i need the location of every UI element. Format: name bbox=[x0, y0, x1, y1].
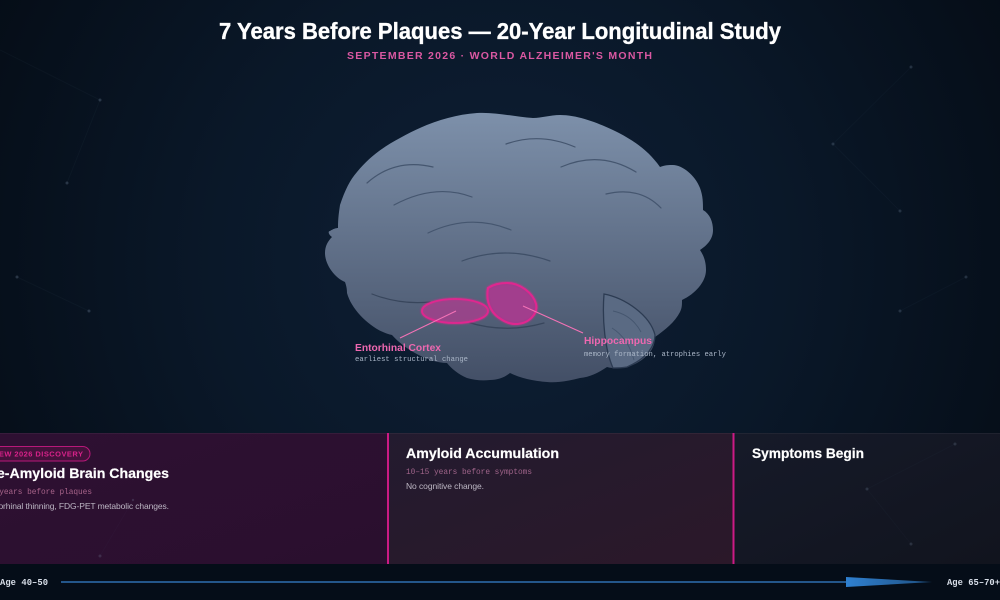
brain silhouette bbox=[325, 113, 713, 382]
panel: symptoms begin bbox=[734, 433, 1000, 564]
timeline bar bbox=[0, 564, 1000, 600]
hippocampus region bbox=[487, 283, 536, 324]
label: entorhinal cortex: earliest structural change bbox=[355, 356, 468, 364]
badge bbox=[0, 446, 90, 461]
leader line: entorhinal bbox=[400, 311, 456, 338]
timeline end label: Age 65–70+ bbox=[947, 578, 1000, 588]
card heading: Amyloid Accumulation bbox=[406, 445, 559, 461]
card timing: 10–15 years before symptoms bbox=[406, 469, 532, 477]
panel: pre-amyloid brain changes bbox=[0, 433, 389, 564]
cerebellum bbox=[603, 294, 655, 368]
brain diagram bbox=[325, 113, 713, 382]
title: 7 Years Before Plaques — 20-Year Longitudinal Study bbox=[219, 18, 781, 44]
label: hippocampus: memory formation, atrophies early bbox=[584, 351, 727, 359]
entorhinal cortex region bbox=[422, 299, 488, 323]
timeline start label: Age 40–50 bbox=[0, 578, 48, 588]
timeline arrow bbox=[846, 577, 932, 587]
leader line: hippocampus bbox=[523, 306, 583, 333]
neural network overlay on cards bbox=[98, 442, 956, 558]
label: hippocampus bbox=[584, 336, 727, 359]
card heading: Symptoms Begin bbox=[752, 445, 864, 461]
label: entorhinal cortex: Entorhinal Cortex bbox=[355, 343, 441, 354]
label: hippocampus: Hippocampus bbox=[584, 336, 652, 347]
card description: No cognitive change. bbox=[406, 481, 484, 491]
neural network background left bbox=[0, 50, 102, 312]
neural network background right bbox=[832, 66, 968, 312]
label: entorhinal cortex bbox=[355, 343, 468, 364]
sulci folds bbox=[367, 139, 661, 328]
subtitle: SEPTEMBER 2026 · WORLD ALZHEIMER'S MONTH bbox=[347, 50, 652, 62]
timeline line bbox=[61, 581, 847, 583]
panel: amyloid accumulation bbox=[389, 433, 734, 564]
